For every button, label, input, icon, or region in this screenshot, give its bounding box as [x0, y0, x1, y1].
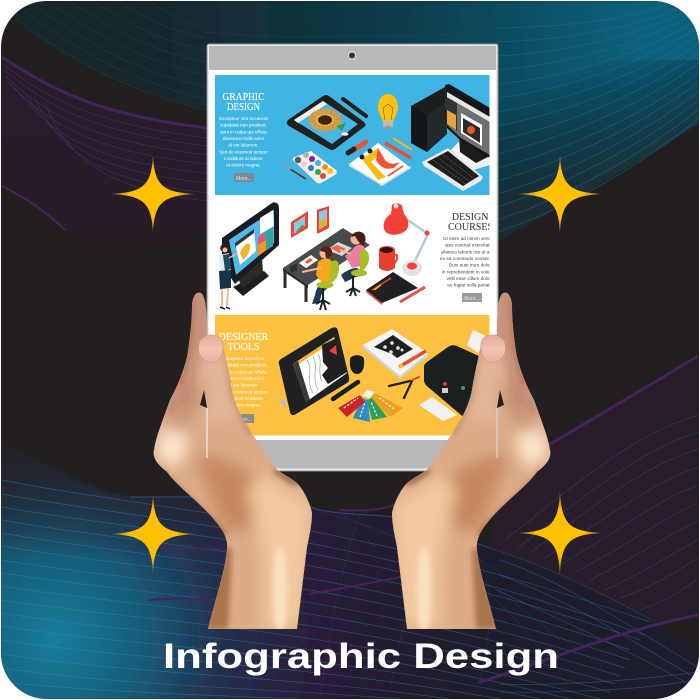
button: more: More... — [464, 296, 480, 302]
text block: designer tools: Sed do eiusmod tempor — [219, 389, 268, 394]
icon: ink cup — [350, 355, 364, 374]
text block: graphic design: sunt in culpa qui officia — [220, 129, 267, 134]
teal wave top — [15, 0, 700, 240]
button: more — [234, 414, 254, 423]
icon: desktop computer — [411, 84, 490, 170]
sparkle top left — [110, 155, 196, 233]
text block: design courses: in reprehenderit in volu — [442, 269, 490, 274]
heading: designer tools: DESIGNER — [219, 332, 269, 343]
button: more: More... — [236, 176, 252, 182]
thumbnail — [198, 335, 223, 363]
designer man — [316, 259, 335, 284]
text block: design courses: Ut enim ad minim veni — [443, 236, 490, 241]
heading: designer tools: TOOLS — [227, 342, 260, 353]
panel: design courses — [219, 202, 493, 310]
icon: keyboard — [422, 148, 483, 191]
text block: designer tools: id est laborum. — [228, 383, 259, 388]
picture frame — [317, 206, 329, 234]
thumbnail — [481, 335, 506, 363]
text block: graphic design: et dolore magna. — [226, 163, 261, 168]
heading: graphic design: DESIGN — [227, 102, 260, 113]
text block: design courses: ex ea commodo consec — [440, 256, 490, 261]
button: more — [462, 293, 482, 302]
icon: stylus — [333, 382, 358, 399]
teal and blue mesh wave bottom — [0, 430, 700, 700]
icon: sketchbook with house plan — [363, 329, 428, 379]
text block: graphic design: deserunt mollit anim — [223, 136, 264, 141]
text block: design courses: quis nostrud exercitat — [445, 243, 490, 248]
icon: paint palette — [293, 151, 337, 184]
text block: designer tools: Excepteur sint id est — [223, 356, 265, 361]
text block: design courses: velit esse cillum dolo — [446, 276, 490, 281]
heading: design courses: DESIGN — [452, 212, 488, 223]
icon: printer — [419, 330, 492, 421]
icon: sketchbook — [349, 143, 411, 186]
left hand — [154, 290, 312, 634]
icon: drawing tablet with sunflower — [287, 95, 366, 150]
icon: light bulb — [378, 94, 398, 130]
tablet edge and gap — [497, 390, 504, 458]
text block: design courses: Duis aute irure dolo — [449, 263, 490, 268]
tablet edge and gap — [200, 390, 207, 458]
tablet top bezel — [209, 46, 496, 70]
tablet bottom bezel — [209, 440, 496, 468]
text block: graphic design: Excepteur sint occaecat — [219, 116, 269, 121]
heading: design courses: COURSES — [448, 222, 493, 233]
text block: graphic design: Sed do eiusmod tempor — [219, 149, 268, 154]
hand shading — [157, 290, 312, 634]
sparkle bottom left — [110, 495, 196, 573]
text block: design courses: ullamco laboris nisi ut a — [441, 249, 490, 254]
text block: designer tools: sunt in culpa qui officia — [220, 369, 267, 374]
panel: graphic design — [215, 75, 490, 195]
illustration: presentation monitor and presenter — [219, 202, 279, 309]
tablet screen — [209, 70, 496, 440]
text block: graphic design: cupidatat non proident, — [220, 123, 267, 128]
text block: designer tools: deserunt mollit anim — [223, 376, 264, 381]
panel: designer tools — [215, 315, 492, 436]
title: Infographic Design — [163, 637, 559, 676]
purple wave left — [1, 56, 206, 231]
icon: paintbrush — [284, 164, 306, 179]
tablet body — [207, 44, 498, 471]
icon: stylus — [343, 99, 366, 116]
right hand — [392, 290, 550, 634]
text block: graphic design: incididunt ut labore — [224, 156, 263, 161]
icon: marker — [348, 142, 366, 153]
sparkle top right — [517, 155, 603, 233]
button: more: More... — [236, 417, 252, 423]
picture frame — [291, 211, 308, 238]
tablet camera — [348, 52, 356, 59]
text block: designer tools: cupidatat non proident, — [220, 363, 267, 368]
designer woman — [345, 245, 366, 268]
website screenshot — [215, 75, 493, 436]
tablet — [207, 44, 498, 471]
text block: graphic design: id est laborum. — [228, 143, 259, 148]
icon: compass — [389, 377, 419, 398]
text block: design courses: eu fugiat nulla pariat — [447, 283, 490, 288]
icon: red ruler — [400, 287, 425, 302]
button: more — [234, 173, 254, 182]
text block: designer tools: et dolore magna. — [226, 403, 261, 408]
purple streaks bottom — [145, 505, 698, 682]
icon: desk lamp — [384, 203, 430, 276]
icon: yellow pencil — [393, 138, 412, 150]
icon: coffee mug — [379, 246, 397, 271]
icon: ruler — [385, 143, 411, 158]
illustration: desk with designers — [283, 228, 370, 310]
sparkle bottom right — [517, 491, 603, 575]
text block: designer tools: incididunt ut labore — [224, 396, 263, 401]
hand shading — [392, 290, 547, 634]
purple mesh wave right — [490, 355, 700, 622]
icon: pen display tablet — [279, 327, 349, 415]
icon: colour swatch fan — [338, 390, 403, 422]
icon: notebook — [366, 272, 418, 305]
heading: graphic design: GRAPHIC — [222, 92, 265, 103]
